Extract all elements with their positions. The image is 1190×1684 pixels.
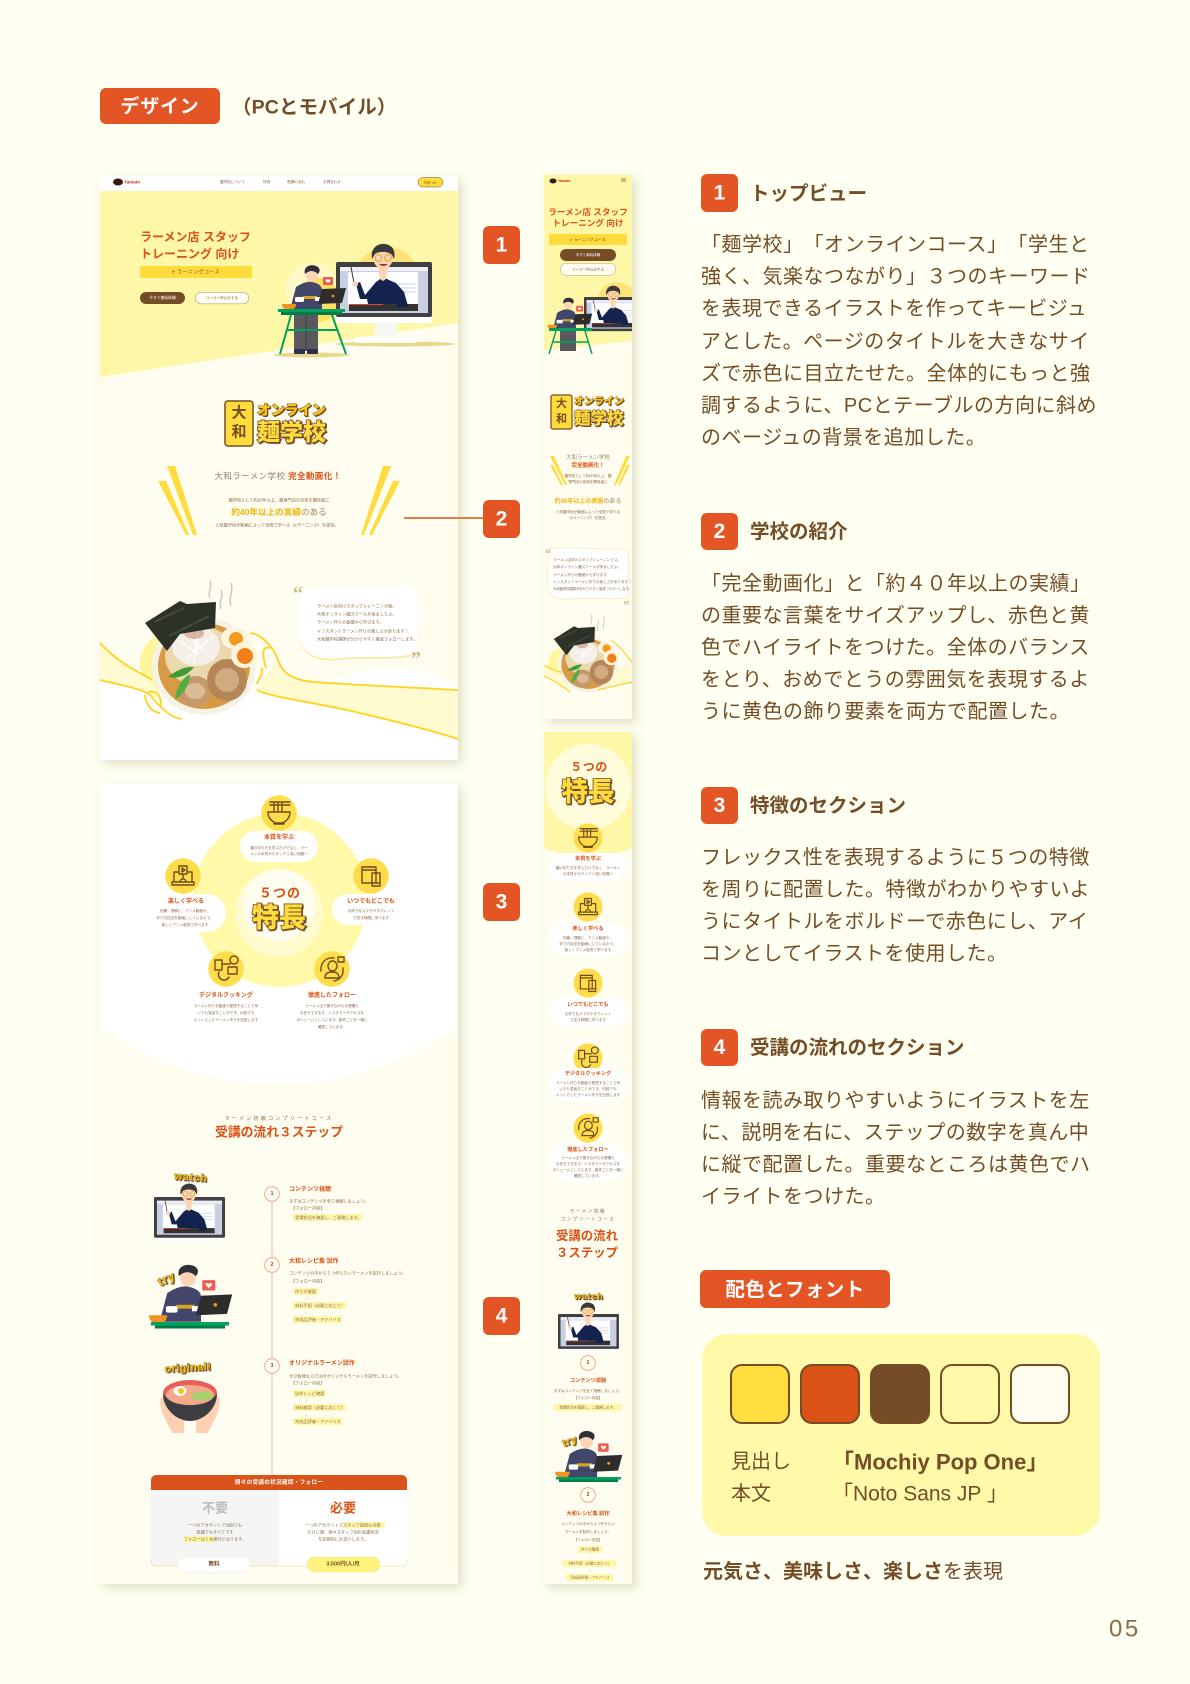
step 3 text: 試作レシピ確認 bbox=[295, 1390, 325, 1397]
step 2 text: 完成品評価・アドバイス bbox=[295, 1316, 341, 1323]
mobile speech bubble: 大和オンライン麺スクールが来ましたよ。 bbox=[553, 564, 621, 569]
PC hero background bbox=[100, 191, 458, 377]
mobile feature 5 bbox=[549, 1114, 626, 1182]
connector line to marker 2 bbox=[404, 517, 484, 519]
mobile feature 2: 知識・理解に、アニメ動画や、 bbox=[563, 935, 613, 940]
PC speech bubble: インスタントラーメン作りの楽しさがあります！ bbox=[317, 628, 409, 634]
mobile speech bubble: インスタントラーメン作りの楽しさがあります！ bbox=[553, 579, 632, 584]
mobile step 2: 完成品評価・アドバイス bbox=[570, 1574, 610, 1580]
PC school logo: 大 bbox=[231, 404, 247, 422]
mobile feature 1: 本質を学ぶ bbox=[575, 854, 602, 862]
mobile speech bubble: ” bbox=[623, 598, 630, 612]
PC hero copy: トレーニング 向け bbox=[140, 246, 239, 261]
mobile hero bbox=[544, 175, 632, 354]
mobile feature 2: 楽しくアニメ感覚で学べます bbox=[565, 947, 612, 952]
PC speech bubble bbox=[293, 583, 421, 670]
explanation 3: features section: うにタイトルをボルドーで赤色にし、アイ bbox=[701, 910, 1088, 933]
feature: digital cooking: デジタルクッキング bbox=[199, 991, 253, 999]
explanation 3: features section: フレックス性を表現するように５つの特徴 bbox=[701, 846, 1090, 869]
features white background bbox=[100, 783, 458, 1084]
mobile feature 1: 麺の切り方を学ぶだけでなく、ラーメン bbox=[556, 865, 621, 870]
features circle diagram bbox=[193, 813, 367, 987]
steps heading bbox=[215, 1115, 343, 1140]
mobile features header: 特長 bbox=[562, 777, 614, 807]
explanation 1: top view: を表現できるイラストを作ってキービジュ bbox=[701, 297, 1087, 320]
section heading: design bbox=[100, 88, 396, 124]
PC white wave bbox=[100, 668, 458, 760]
table column: not needed: フォローは１名様分となります。 bbox=[184, 1536, 246, 1542]
step 3 text: ↓ bbox=[305, 1412, 307, 1417]
mobile intro copy: 完全動画化！ bbox=[571, 461, 605, 469]
explanation 2: school intro: 学校の紹介 bbox=[750, 520, 848, 543]
table column: needed bbox=[305, 1500, 385, 1572]
PC intro copy: 大和ラーメン学校 完全動画化！ bbox=[214, 471, 342, 481]
PC nav header: Sign up bbox=[424, 180, 436, 184]
mobile features header: ５つの bbox=[570, 760, 608, 774]
feature: thorough follow up: お任せできます。ハスタマーサクセスを bbox=[300, 1010, 365, 1015]
step 2 text: コンテンツの中から１つ作りたいラーメンを試作しましょう。 bbox=[289, 1270, 406, 1276]
marker 1 bbox=[483, 226, 520, 264]
PC speech bubble: ラーメン店向けスタッフトレーニング版。 bbox=[317, 602, 396, 610]
explanation 2: school intro: 色でハイライトをつけた。全体のバランス bbox=[701, 636, 1090, 659]
mobile step 2: 大和レシピ集 試作 bbox=[567, 1509, 610, 1517]
feature: fun learning bbox=[155, 858, 226, 932]
explanation 4: course flow section: に、説明を右に、ステップの数字を真ん中 bbox=[701, 1121, 1089, 1144]
explanation 2: school intro bbox=[701, 513, 1090, 723]
PC nav header: お問合わせ bbox=[323, 179, 341, 184]
mobile feature 5: ボリュームとしています。動作ごとを一緒に bbox=[552, 1167, 624, 1172]
font names: 見出し bbox=[731, 1450, 791, 1473]
table column: needed: 3,500円/人/月 bbox=[326, 1560, 360, 1568]
feature: digital cooking: ラーメン作りを動画で配信することで何 bbox=[194, 1003, 259, 1008]
page number: 05 bbox=[1109, 1616, 1141, 1642]
feature: digital cooking bbox=[194, 951, 259, 1022]
mobile intro copy: 専門店の技術を関係者に bbox=[568, 479, 608, 484]
mobile feature 5: 徹底したフォロー bbox=[567, 1145, 609, 1153]
mobile step 1: コンテンツ視聴 bbox=[570, 1376, 607, 1384]
mobile school logo: 大 bbox=[556, 396, 567, 410]
feature: learn the essence bbox=[240, 795, 318, 862]
colour swatches bbox=[731, 1365, 1069, 1423]
step 2 text: 【フォロー内容】 bbox=[291, 1278, 325, 1284]
mobile school logo bbox=[551, 395, 624, 429]
step 2 text bbox=[289, 1257, 406, 1323]
explanation 2: school intro: うに黄色の飾り要素を両方で配置した。 bbox=[701, 700, 1070, 723]
mobile intro copy: 人気麺学校が動画によって全国で学べる bbox=[556, 509, 621, 514]
panel: PC first view and school intro bbox=[100, 175, 458, 760]
explanation 4: course flow section: 情報を読み取りやすいようにイラストを左 bbox=[701, 1089, 1090, 1112]
PC hero illustration bbox=[274, 244, 455, 358]
mobile step 1: 1 bbox=[587, 1360, 590, 1366]
step 2 text: ↓ bbox=[305, 1310, 307, 1315]
mobile feature 5: お任せできます。ハスタマーサクセスを bbox=[556, 1161, 621, 1166]
mobile school logo: 麺学校 bbox=[574, 408, 624, 428]
mobile steps heading: ３ステップ bbox=[556, 1246, 619, 1260]
mobile speech bubble: 大和麺学校講師が分かりやすく徹底フォローします。 bbox=[553, 586, 632, 591]
mobile hero: ラーメン店 スタッフ bbox=[548, 206, 628, 217]
step 2 text: 作り方確認 bbox=[295, 1288, 317, 1295]
step 3 original illustration bbox=[160, 1361, 220, 1433]
mobile features header bbox=[544, 732, 632, 856]
mobile feature 4: ふっくらしたラーメン作りを伝授します bbox=[556, 1092, 621, 1097]
PC nav header bbox=[100, 175, 458, 191]
features circle diagram: ５つの bbox=[259, 886, 301, 900]
step 2 text: ↓ bbox=[305, 1296, 307, 1301]
marker 3: 3 bbox=[496, 890, 507, 914]
font names: 「Noto Sans JP 」 bbox=[832, 1482, 1008, 1506]
feature: learn the essence: 麺の切り方を学ぶだけでなく、ラー bbox=[250, 845, 308, 850]
marker 3 bbox=[483, 883, 520, 921]
follow up comparison table bbox=[151, 1475, 407, 1572]
mobile feature 5: ラーメン店で働きながらの受講も bbox=[561, 1155, 615, 1160]
mobile intro copy: （eラーニング）を提供。 bbox=[567, 515, 609, 520]
mobile feature 3: お好きなスマホやタブレット bbox=[565, 1011, 612, 1016]
explanation 4: course flow section bbox=[701, 1029, 1090, 1208]
mobile feature 3 bbox=[549, 968, 626, 1026]
mobile feature 4: デジタルクッキング bbox=[565, 1069, 612, 1077]
PC school logo: 和 bbox=[231, 424, 247, 440]
mobile steps heading bbox=[556, 1208, 619, 1260]
PC speech bubble: “ bbox=[293, 583, 303, 605]
feature: anytime anywhere: で空き時間に学べます bbox=[353, 915, 389, 920]
mobile step 1: 受講状況を確認し、ご連絡します。 bbox=[559, 1404, 617, 1410]
step 1 text: まずはコンテンツを全て視聴しましょう。 bbox=[289, 1198, 368, 1204]
table column: not needed: 一つのアカウントで何回でも bbox=[188, 1522, 242, 1528]
mobile step 2: try bbox=[561, 1434, 579, 1450]
feature: anytime anywhere: お好きなスマホやタブレット bbox=[348, 908, 395, 913]
PC nav header: 麺学校について bbox=[220, 179, 245, 184]
steps heading: ラーメン初級コンプリートコース bbox=[225, 1115, 333, 1122]
feature: digital cooking: いでも見返すことができ、何回でも bbox=[197, 1010, 255, 1015]
mobile step 1 bbox=[554, 1291, 622, 1411]
mobile step 2: 作り方確認 bbox=[581, 1546, 599, 1552]
steps timeline: 2 bbox=[271, 1262, 274, 1268]
PC school logo bbox=[225, 401, 326, 446]
follow up comparison table: 個々の受講の状況確認・フォロー bbox=[235, 1478, 323, 1486]
explanation 2: school intro: の重要な言葉をサイズアップし、赤色と黄 bbox=[701, 604, 1090, 627]
mobile hero: トレーニング 向け bbox=[552, 217, 624, 228]
feature: anytime anywhere: いつでもどこでも bbox=[347, 897, 395, 905]
section heading: design: デザイン bbox=[120, 94, 200, 118]
panel: PC features and steps bbox=[100, 783, 458, 1584]
explanation 3: features section: 特徴のセクション bbox=[750, 795, 906, 817]
panel: mobile features and steps bbox=[544, 732, 632, 1584]
feature: digital cooking: ふっくらしたラーメン作りを伝授します bbox=[194, 1017, 259, 1022]
PC speech bubble: ” bbox=[411, 648, 421, 670]
font names bbox=[731, 1450, 1048, 1506]
mobile intro copy: 麺学校として約20年以上、麺 bbox=[564, 473, 612, 478]
mobile steps heading: ラーメン初級 bbox=[570, 1208, 606, 1214]
font names: 本文 bbox=[731, 1482, 771, 1505]
step 1 watch illustration: watch bbox=[173, 1171, 208, 1185]
explanation 4: course flow section: 受講の流れのセクション bbox=[750, 1036, 965, 1059]
steps heading: 受講の流れ３ステップ bbox=[215, 1124, 343, 1140]
mobile school logo: オンライン bbox=[574, 396, 624, 408]
table column: needed: 一つのアカウントでスタッフ指導も可能 bbox=[305, 1522, 381, 1528]
mobile feature 2: 楽しく学べる bbox=[572, 924, 604, 932]
explanation 2: school intro: をとり、おめでとうの雰囲気を表現するよ bbox=[701, 668, 1090, 691]
feature: thorough follow up: ラーメン店で働きながらの受講も bbox=[305, 1003, 359, 1008]
step 3 text: ↓ bbox=[305, 1398, 307, 1403]
PC nav header: 受講の流れ bbox=[287, 179, 305, 184]
mobile step 2: コンテンツの中から１つ作りたい bbox=[561, 1521, 615, 1526]
table column: needed: だけに限、個々スタッフ別の受講状況 bbox=[307, 1528, 379, 1536]
explanation 4: course flow section: イライトをつけた。 bbox=[701, 1186, 886, 1208]
mobile speech bubble: “ bbox=[545, 546, 552, 560]
colour and font panel bbox=[702, 1334, 1100, 1536]
step 1 text: 受講状況を確認し、ご連絡します。 bbox=[295, 1214, 362, 1221]
PC school logo: 麺学校 bbox=[257, 419, 326, 445]
step 3 text: ぜひ皆様ならではのオリジナルラーメンを試作しましょう。 bbox=[289, 1372, 402, 1380]
marker 1: 1 bbox=[496, 234, 508, 256]
explanation 1: top view bbox=[701, 174, 1097, 449]
mobile feature 1 bbox=[549, 824, 626, 881]
section heading: design: （PCとモバイル） bbox=[232, 96, 396, 118]
mobile feature 4: ラーメン作りを動画で配信することで何 bbox=[556, 1080, 621, 1085]
explanation 3: features section: 3 bbox=[714, 794, 725, 817]
explanation 1: top view: トップビュー bbox=[750, 183, 867, 205]
explanation 1: top view: 強く、気楽なつながり」３つのキーワード bbox=[701, 265, 1090, 288]
PC nav header: Yamato bbox=[124, 180, 140, 184]
features circle diagram: 特長 bbox=[252, 903, 306, 933]
marker 2: 2 bbox=[496, 508, 507, 530]
step 3 text: 完成品評価・アドバイス bbox=[295, 1418, 341, 1425]
feature: learn the essence: 本質を学ぶ bbox=[264, 833, 294, 841]
mobile feature 5: 確認しています。 bbox=[574, 1173, 602, 1178]
explanation 1: top view: 1 bbox=[714, 182, 726, 204]
mobile step 1: watch bbox=[573, 1291, 604, 1301]
step 3 text: 材料確認（必要に応じて） bbox=[295, 1404, 345, 1411]
explanation 1: top view: のベージュの背景を追加した。 bbox=[701, 426, 986, 449]
PC hero copy: e ラーニングコース bbox=[172, 268, 220, 276]
step 1 text: 【フォロー内容】 bbox=[291, 1204, 325, 1212]
mobile feature 3: いつでもどこでも bbox=[567, 1000, 609, 1008]
PC nav header: 特長 bbox=[263, 179, 271, 184]
table column: not needed: 受講でもすべてです bbox=[196, 1528, 234, 1536]
mobile feature 4: いでも見返すことができ、何回でも bbox=[559, 1086, 617, 1091]
feature: fun learning: 作り方技法を動画にしているので、 bbox=[156, 915, 214, 920]
steps timeline: 1 bbox=[271, 1191, 274, 1197]
step 1 watch illustration bbox=[154, 1171, 225, 1241]
table column: needed: 必要 bbox=[330, 1500, 356, 1516]
PC hero copy: 今すぐ無料体験 bbox=[149, 295, 176, 300]
step 2 text: 大和レシピ集 試作 bbox=[289, 1257, 339, 1265]
table column: needed: を定期的にお送りします。 bbox=[318, 1536, 368, 1542]
mobile step 2: 【フォロー内容】 bbox=[574, 1537, 602, 1542]
mobile feature 4 bbox=[549, 1044, 626, 1102]
PC hero copy: コースへ申込みする bbox=[206, 295, 238, 300]
step 2 text: 材料手配（必要に応じて） bbox=[295, 1302, 345, 1309]
closing statement: 元気さ、美味しさ、楽しさを表現 bbox=[703, 1560, 1003, 1583]
explanation 1: top view: アとした。ページのタイトルを大きなサイ bbox=[701, 330, 1090, 353]
marker 2 bbox=[483, 500, 520, 538]
mobile step 1: まずはコンテンツを全て視聴しましょう。 bbox=[554, 1388, 622, 1393]
steps timeline bbox=[265, 1187, 279, 1475]
PC speech bubble: ラーメン作りの基礎から学びます。 bbox=[317, 618, 383, 626]
mobile yellow rays bbox=[550, 456, 630, 485]
mobile intro copy: 約40年以上の実績のある bbox=[555, 497, 621, 505]
marker 4 bbox=[483, 1297, 520, 1335]
feature: thorough follow up: 確認しています。 bbox=[318, 1024, 346, 1029]
mobile school logo: 和 bbox=[556, 411, 567, 425]
PC yellow rays bbox=[158, 466, 400, 535]
PC hero copy bbox=[140, 230, 252, 304]
feature: thorough follow up bbox=[296, 951, 368, 1029]
mobile hero: 今すぐ無料体験 bbox=[576, 252, 601, 257]
colour and font heading: 配色とフォント bbox=[725, 1279, 865, 1301]
PC intro copy bbox=[214, 471, 342, 528]
step 1 text bbox=[289, 1185, 368, 1221]
step 3 text bbox=[289, 1359, 402, 1425]
step 3 text: 【フォロー内容】 bbox=[291, 1380, 325, 1386]
feature: thorough follow up: 徹底したフォロー bbox=[308, 991, 356, 999]
mobile hero: Yamato bbox=[558, 179, 570, 183]
mobile steps heading: コンプリートコース bbox=[561, 1216, 615, 1222]
mobile step 2: ↓ bbox=[589, 1568, 591, 1572]
explanation 4: course flow section: に縦で配置した。重要なところは黄色でハ bbox=[701, 1153, 1090, 1176]
mobile ramen bowl bbox=[544, 615, 632, 692]
mobile step 1: 【フォロー内容】 bbox=[574, 1395, 602, 1400]
PC intro copy: 麺学校として約20年以上、麺専門店の技術を関係者に bbox=[229, 496, 329, 504]
panel: mobile first view and intro bbox=[544, 175, 644, 719]
mobile feature 3: で空き時間に学べます bbox=[570, 1017, 606, 1022]
mobile feature 2 bbox=[549, 892, 626, 956]
mobile step 2: ↓ bbox=[589, 1554, 591, 1558]
table column: not needed: 不要 bbox=[202, 1500, 228, 1516]
table column: not needed bbox=[178, 1500, 250, 1572]
explanation 1: top view: 調するように、PCとテーブルの方向に斜め bbox=[701, 393, 1097, 417]
feature: thorough follow up: ボリュームとしています。動作ごとを一緒に bbox=[296, 1017, 368, 1022]
marker 4: 4 bbox=[496, 1304, 508, 1328]
explanation 1: top view: ズで赤色に目立たせた。全体的にもっと強 bbox=[701, 362, 1090, 385]
table column: not needed: 無料 bbox=[208, 1560, 220, 1568]
mobile speech bubble: ラーメン店向けスタッフトレーニングス。 bbox=[553, 557, 621, 562]
steps timeline: 3 bbox=[271, 1363, 274, 1369]
PC school logo: オンライン bbox=[257, 402, 326, 418]
step 3 text: オリジナルラーメン試作 bbox=[289, 1359, 355, 1367]
explanation 3: features section: コンとしてイラストを使用した。 bbox=[701, 942, 1008, 965]
step 2 try illustration bbox=[149, 1265, 232, 1328]
PC intro copy: 人気麺学校が動画によって全国で学べる（eラーニング）を提供。 bbox=[215, 522, 339, 528]
explanation 2: school intro: 2 bbox=[714, 520, 725, 543]
colour and font heading bbox=[700, 1270, 890, 1308]
mobile hero: e ラーニングコース bbox=[570, 236, 606, 242]
mobile feature 1: の本質からザックリ深い知識へ bbox=[563, 871, 614, 876]
explanation 4: course flow section: 4 bbox=[714, 1036, 726, 1059]
explanation 3: features section bbox=[701, 787, 1090, 965]
feature: fun learning: 楽しく学べる bbox=[168, 897, 204, 905]
mobile step 2: ラーメンを試作しましょう。 bbox=[565, 1529, 611, 1534]
feature: fun learning: 楽しくアニメ感覚で学べます bbox=[162, 922, 209, 927]
PC intro copy: 約40年以上の実績のある bbox=[231, 506, 327, 517]
mobile steps heading: 受講の流れ bbox=[556, 1228, 619, 1243]
feature: learn the essence: メンの本質からザックリ深い知識へ bbox=[250, 851, 308, 856]
explanation 3: features section: を周りに配置した。特徴がわかりやすいよ bbox=[701, 878, 1090, 901]
mobile hero: コースへ申込みする bbox=[572, 266, 604, 271]
font names: 「Mochiy Pop One」 bbox=[832, 1450, 1048, 1474]
mobile speech bubble bbox=[545, 546, 632, 612]
feature: anytime anywhere bbox=[332, 858, 404, 925]
mobile step 2 bbox=[555, 1431, 622, 1581]
PC speech bubble: 大和麺学校講師が分かりやすく徹底フォローします。 bbox=[317, 636, 417, 642]
explanation 2: school intro: 「完全動画化」と「約４０年以上の実績」 bbox=[701, 572, 1090, 595]
step 1 text: コンテンツ視聴 bbox=[289, 1185, 331, 1193]
step 3 original illustration: original! bbox=[164, 1361, 212, 1375]
mobile feature 2: 作り方技法を動画にしているので、 bbox=[559, 941, 617, 946]
mobile step 2: 材料手配（必要に応じて） bbox=[568, 1560, 612, 1566]
mobile step 2: 2 bbox=[587, 1492, 590, 1498]
PC hands holding bowl bbox=[100, 581, 458, 739]
PC speech bubble: 大和オンライン麺スクールが来ましたよ。 bbox=[317, 610, 397, 618]
mobile intro copy bbox=[555, 453, 621, 520]
feature: fun learning: 知識・理解に、アニメ動画や、 bbox=[160, 908, 210, 913]
mobile speech bubble: ラーメン作りの基礎から学びます。 bbox=[553, 572, 610, 577]
step 2 try illustration: try bbox=[156, 1271, 178, 1289]
PC hero copy: ラーメン店 スタッフ bbox=[140, 230, 251, 244]
explanation 1: top view: 「麺学校」「オンラインコース」「学生と bbox=[701, 233, 1090, 256]
mobile intro copy: 大和ラーメン学校 bbox=[566, 453, 610, 461]
